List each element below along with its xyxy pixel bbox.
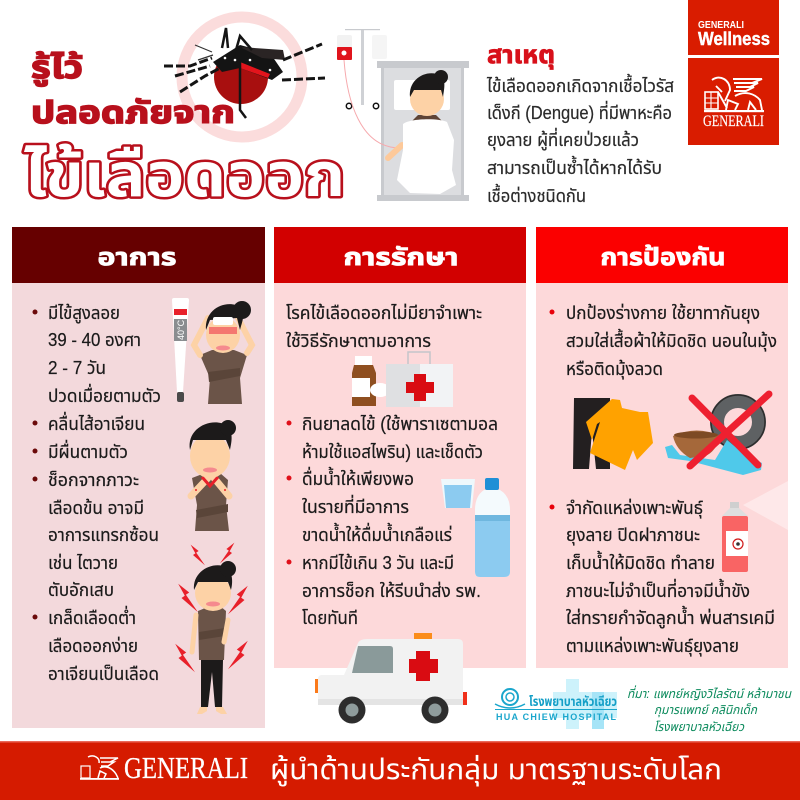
- cause text block: ไข้เลือดออกเกิดจากเชื้อไวรัส: [486, 73, 674, 96]
- panel: prevention: [536, 227, 788, 668]
- logo: Hua Chiew Hospital: [495, 679, 617, 729]
- treatment list: ดื่มน้ำให้เพียงพอ: [302, 466, 414, 489]
- heading: symptoms: [12, 227, 265, 283]
- logo: Generali lion: GENERALI: [703, 113, 764, 130]
- treatment list: ขาดน้ำให้ดื่มน้ำเกลือแร่: [302, 522, 452, 545]
- treatment list: หากมีไข้เกิน 3 วัน และมี: [302, 553, 454, 573]
- panel: treatment: [274, 227, 526, 668]
- symptoms list: เช่น ไตวาย: [48, 553, 118, 573]
- symptoms list: เกล็ดเลือดต่ำ: [48, 605, 136, 628]
- icon: patient in bed with IV: [337, 29, 469, 201]
- panel: symptoms: [12, 227, 265, 728]
- symptoms list: อาการแทรกซ้อน: [48, 525, 159, 545]
- prevention list: สวมใส่เสื้อผ้าให้มิดชิด นอนในมุ้ง: [566, 328, 777, 352]
- prevention list: ยุงลาย ปิดฝาภาชนะ: [566, 525, 700, 546]
- cause text block: สาเหตุ: [487, 41, 555, 70]
- symptoms list: ตับอักเสบ: [48, 580, 114, 600]
- treatment list: กินยาลดไข้ (ใช้พาราเซตามอล: [302, 414, 498, 434]
- logo: Generali lion: [688, 58, 779, 145]
- prevention list: ตามแหล่งเพาะพันธุ์ยุงลาย: [566, 636, 739, 657]
- symptoms list: มีผื่นตามตัว: [48, 439, 128, 462]
- heading: treatment: การรักษา: [344, 244, 458, 271]
- icon: mosquito on target: [164, 17, 325, 137]
- heading: prevention: การป้องกัน: [600, 244, 726, 271]
- treatment list: โดยทันที: [302, 608, 358, 628]
- logo: Generali Wellness: [688, 0, 779, 55]
- icon: shivering woman with bolts: [175, 543, 248, 714]
- heading: treatment: [274, 227, 526, 283]
- symptoms list: ช็อกจากภาวะ: [48, 470, 139, 490]
- treatment list: ห้ามใช้แอสไพริน) และเช็ดตัว: [302, 442, 483, 462]
- footer banner: ผู้นำด้านประกันกลุ่ม มาตรฐานระดับโลก: [270, 754, 722, 787]
- icon: woman with rash: [190, 420, 236, 531]
- icon: medicine bottle and first aid kit: [352, 352, 453, 407]
- logo: Hua Chiew Hospital: โรงพยาบาลหัวเฉียว: [529, 694, 617, 709]
- icon: woman with headache: [194, 301, 252, 404]
- prevention list: หรือติดมุ้งลวด: [566, 359, 663, 380]
- icon: ambulance: [315, 633, 467, 724]
- icon: thermometer: 40°C: [176, 319, 186, 340]
- footer banner: [0, 741, 800, 800]
- treatment list: [286, 303, 498, 628]
- prevention list: ใส่ทรายกำจัดลูกน้ำ พ่นสารเคมี: [566, 605, 775, 630]
- prevention list: [550, 303, 777, 657]
- symptoms list: มีไข้สูงลอย: [48, 303, 120, 325]
- title: รู้ไว้: [31, 50, 83, 86]
- prevention list: ปกป้องร่างกาย ใช้ยาทากันยุง: [566, 303, 760, 324]
- symptoms list: เลือดข้น อาจมี: [48, 498, 144, 518]
- symptoms list: [32, 303, 161, 684]
- cause text block: สามารถเป็นซ้ำได้หากได้รับ: [487, 155, 662, 178]
- prevention list: เก็บน้ำให้มิดชิด ทำลาย: [566, 550, 715, 573]
- title: ไข้เลือดออก: [24, 141, 345, 209]
- source credit: กุมารแพทย์ คลินิกเด็ก: [654, 703, 757, 718]
- symptoms list: คลื่นไส้อาเจียน: [48, 411, 145, 434]
- title: ปลอดภัยจาก: [31, 95, 235, 130]
- symptoms list: เลือดออกง่าย: [48, 636, 138, 656]
- symptoms list: 39 - 40 องศา: [48, 330, 141, 350]
- source credit: ที่มา: แพทย์หญิงวิไลรัตน์ หล้ามาชน: [627, 685, 792, 701]
- prevention list: ภาชนะไม่จำเป็นที่อาจมีน้ำขัง: [566, 578, 750, 601]
- source credit: โรงพยาบาลหัวเฉียว: [654, 720, 745, 734]
- symptoms list: อาเจียนเป็นเลือด: [48, 664, 159, 684]
- treatment list: อาการช็อก ให้รีบนำส่ง รพ.: [302, 581, 481, 601]
- footer lion logo: [80, 756, 119, 780]
- cause text block: ยุงลาย ผู้ที่เคยป่วยแล้ว: [487, 127, 639, 152]
- source credit: [627, 685, 792, 734]
- logo: Generali Wellness: Wellness: [698, 29, 770, 49]
- title: [24, 50, 345, 209]
- cause text block: เชื้อต่างชนิดกัน: [487, 183, 586, 206]
- icon: long trousers and long-sleeve shirt: [573, 398, 653, 470]
- symptoms list: 2 - 7 วัน: [48, 358, 106, 378]
- treatment list: โรคไข้เลือดออกไม่มียาจำเพาะ: [286, 303, 482, 323]
- symptoms list: ปวดเมื่อยตามตัว: [48, 383, 161, 406]
- icon: insect spray can: [722, 481, 788, 572]
- logo: Hua Chiew Hospital: HUA CHIEW HOSPITAL: [496, 712, 616, 722]
- heading: symptoms: อาการ: [98, 244, 176, 271]
- icon: crossed out tyre and bowl: [665, 394, 769, 475]
- cause text block: [486, 41, 674, 206]
- heading: prevention: [536, 227, 788, 283]
- cause text block: เด็งกี (Dengue) ที่มีพาหะคือ: [487, 100, 672, 123]
- icon: thermometer: [172, 298, 189, 402]
- logo: Generali Wellness: GENERALI: [698, 19, 744, 31]
- prevention list: จำกัดแหล่งเพาะพันธุ์: [566, 498, 703, 519]
- icon: glass and water bottle: [441, 478, 510, 577]
- treatment list: ใช้วิธีรักษาตามอาการ: [286, 331, 431, 351]
- footer banner: GENERALI: [124, 750, 248, 785]
- treatment list: ในรายที่มีอาการ: [302, 494, 409, 517]
